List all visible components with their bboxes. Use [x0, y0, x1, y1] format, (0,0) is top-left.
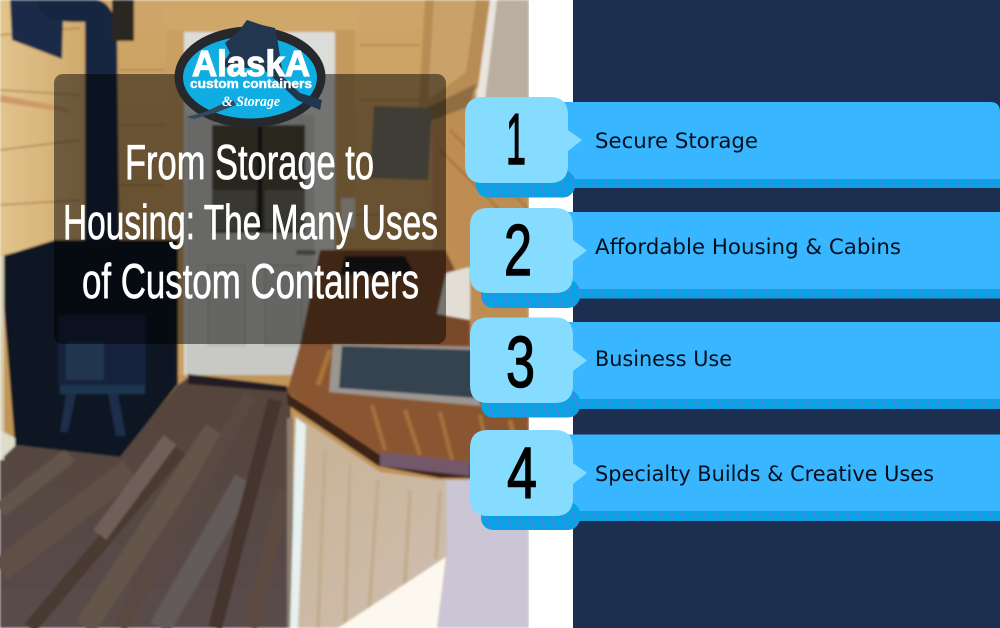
door lower panels — [207, 344, 246, 346]
item 3 number tab — [470, 318, 587, 403]
sink — [329, 344, 480, 406]
item 2: Affordable Housing & Cabins: 2 — [504, 211, 532, 291]
upper cabinet — [420, 0, 491, 107]
item 4: Specialty Builds & Creative Uses: 4 — [507, 434, 537, 514]
icon: Alaska silhouette — [220, 20, 322, 110]
item 1: Secure Storage — [465, 97, 1000, 198]
item 2: Affordable Housing & Cabins — [470, 208, 1000, 308]
title panel — [54, 74, 446, 344]
black wainscot — [0, 240, 178, 457]
item 2 number tab — [470, 208, 587, 293]
light switch — [341, 198, 355, 228]
white centre strip — [529, 0, 573, 628]
floor — [0, 376, 296, 628]
back wall — [1, 0, 478, 482]
title — [63, 136, 438, 309]
logo: Alaska Custom Containers & Storage: AlaskA — [192, 43, 310, 84]
item 3: Business Use: Business Use — [595, 347, 732, 371]
right side wood wall — [432, 90, 529, 345]
item 2: Affordable Housing & Cabins: Affordable Housing & Cabins — [595, 235, 901, 259]
electrical panel — [370, 106, 432, 180]
logo: Alaska Custom Containers & Storage: & Storage — [222, 94, 280, 110]
countertop — [287, 345, 529, 470]
item 2 band — [555, 212, 1000, 298]
white box — [437, 267, 470, 320]
stove burner — [340, 256, 415, 275]
cabinet front — [292, 414, 448, 628]
right navy background — [573, 0, 1000, 628]
baseboard — [188, 374, 287, 392]
item 3 band — [555, 322, 1000, 409]
background photo: container interior — [0, 0, 529, 628]
item 3: Business Use — [470, 318, 1000, 418]
counter edge — [286, 394, 470, 480]
floor planks — [0, 395, 285, 628]
item 4: Specialty Builds & Creative Uses: Specialty Builds & Creative Uses — [595, 462, 934, 486]
item 1: Secure Storage: 1 — [506, 100, 526, 180]
item 4: Specialty Builds & Creative Uses — [470, 430, 1000, 530]
stove pipe — [10, 0, 63, 59]
item 3: Business Use: 3 — [506, 323, 535, 403]
item 4 number tab — [470, 430, 587, 516]
item 4 band — [555, 434, 1000, 521]
door window — [212, 125, 305, 233]
curtain edge — [484, 0, 529, 97]
counter rear — [300, 250, 470, 345]
title: Housing: The Many Uses — [63, 196, 438, 250]
item 1: Secure Storage: Secure Storage — [595, 129, 758, 153]
wood stove — [58, 315, 146, 436]
item 1 band — [550, 102, 1000, 188]
door handle — [296, 250, 316, 255]
door — [184, 32, 335, 375]
logo: Alaska Custom Containers & Storage: custom containers — [190, 77, 312, 91]
item 1 number tab — [465, 97, 582, 183]
door trim — [163, 10, 358, 32]
title: of Custom Containers — [82, 255, 419, 309]
logo: Alaska Custom Containers & Storage — [174, 20, 326, 128]
left wall — [0, 0, 85, 255]
sunlight patch — [338, 557, 446, 628]
title: From Storage to — [125, 136, 374, 190]
